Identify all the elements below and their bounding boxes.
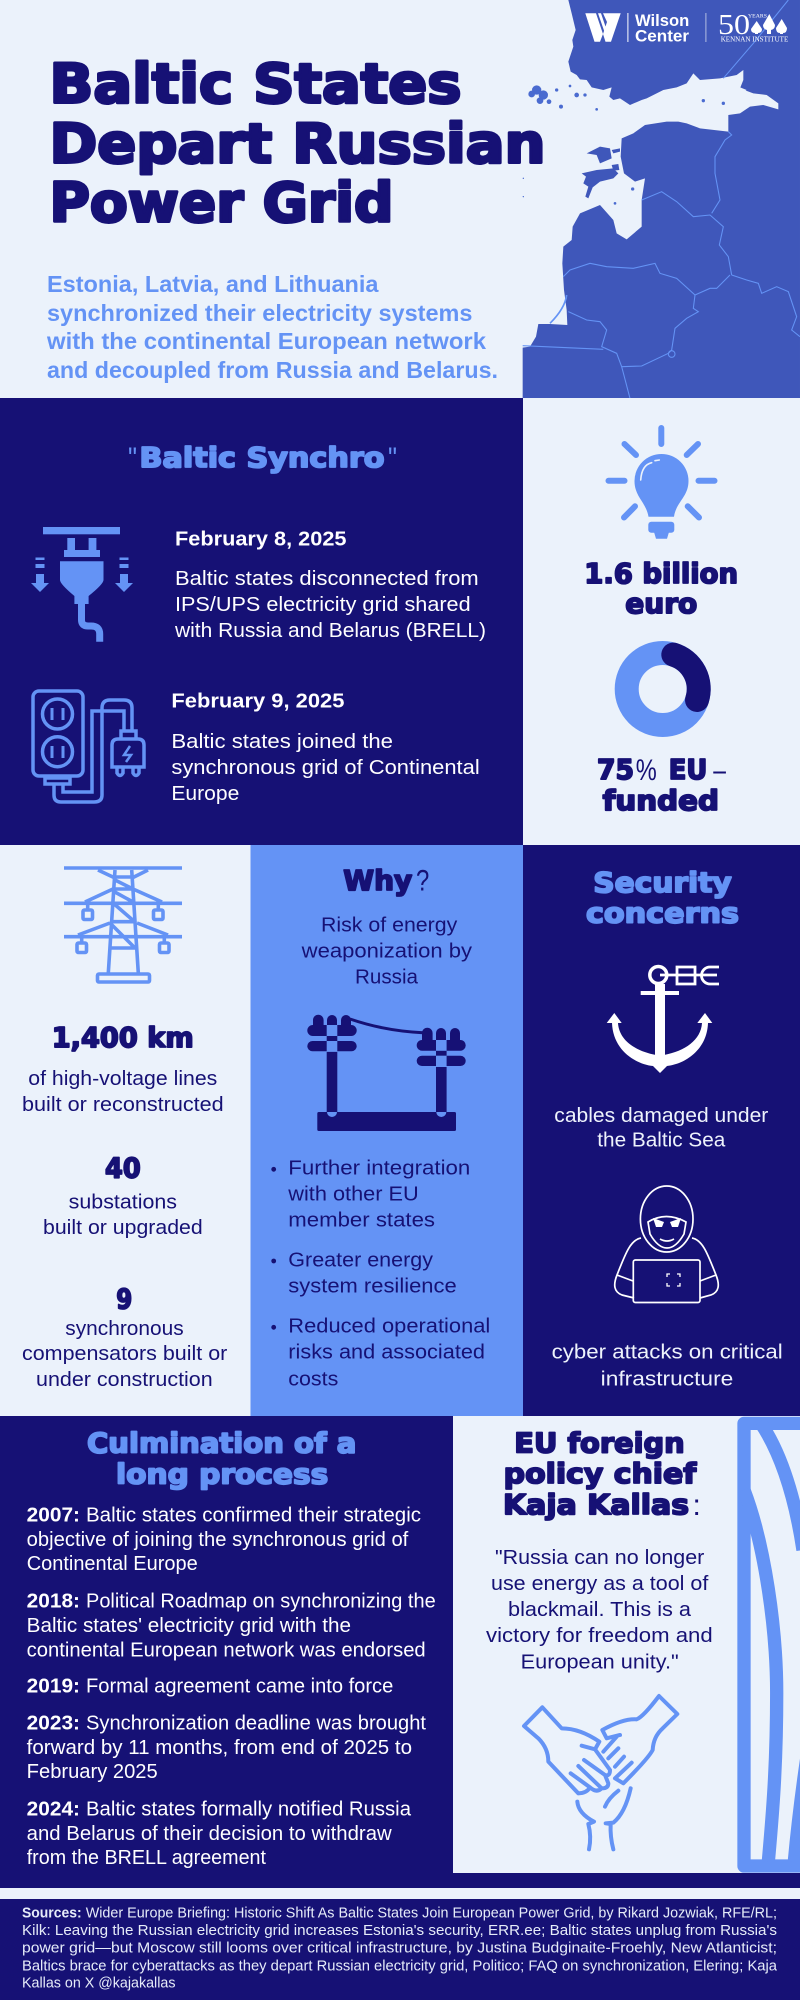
stat: 1.6 billion euro xyxy=(584,558,738,620)
text: risk of weaponization: weaponization by xyxy=(301,941,472,963)
timeline: 2019: 2019: xyxy=(27,1676,80,1698)
timeline: 2007 xyxy=(27,1505,421,1575)
stat: 9 synchronous compensators: compensators built or xyxy=(22,1343,228,1365)
quote text: European unity." xyxy=(521,1652,679,1674)
text: February 9 event xyxy=(171,691,480,805)
panel: sources: Kilk: Leaving the Russian electricity grid increases Estonia's security, ERR.ee; Baltic states unplug from Russia's xyxy=(22,1923,777,1939)
panel: header xyxy=(0,0,800,398)
icon: anchor with chain xyxy=(607,966,719,1073)
stat: 75% EU-funded xyxy=(597,754,726,817)
text: February 8 event: Baltic states disconnected from xyxy=(175,568,479,590)
stat: 1,400 km: built or reconstructed xyxy=(22,1094,224,1116)
timeline: 2023: February 2025 xyxy=(27,1761,158,1783)
list: reasons xyxy=(271,1158,490,1391)
timeline: 2007: Continental Europe xyxy=(27,1553,198,1575)
icon: joined hands xyxy=(524,1696,677,1849)
panel: funding xyxy=(523,398,800,845)
text: February 8 event: IPS/UPS electricity grid shared xyxy=(175,594,471,616)
quote text xyxy=(486,1547,713,1674)
heading: EU foreign policy chief: policy chief xyxy=(504,1458,697,1490)
stat: 40 substations xyxy=(43,1152,203,1239)
heading: Baltic Synchro: " xyxy=(128,442,137,475)
logo: 50 years Kennan Institute: YEARS xyxy=(748,14,767,20)
title: Power Grid xyxy=(50,172,394,234)
subtitle: with the continental European network xyxy=(46,328,487,354)
timeline: 2018 xyxy=(27,1591,436,1662)
heading: Why?: ? xyxy=(416,865,429,898)
timeline: 2024: 2024: xyxy=(27,1799,80,1821)
list: reasons: Reduced operational xyxy=(288,1316,490,1338)
logo: Wilson Center: Wilson xyxy=(635,11,689,30)
heading: EU foreign policy chief: : xyxy=(692,1489,701,1522)
text: February 9 event: synchronous grid of Continental xyxy=(171,757,480,779)
heading: Why?: Why xyxy=(343,865,412,897)
icon: power line poles xyxy=(307,1015,466,1131)
panel: Kaja Kallas quote xyxy=(453,1416,800,1873)
text: cables damaged: the Baltic Sea xyxy=(597,1130,726,1152)
text: risk of weaponization: Russia xyxy=(355,967,419,989)
list: reasons: member states xyxy=(288,1210,435,1232)
timeline: 2023: Synchronization deadline was brought xyxy=(86,1712,426,1734)
stat: 9 synchronous compensators: under construction xyxy=(36,1369,213,1391)
timeline: 2023: 2023: xyxy=(27,1712,80,1734)
logo: Wilson Center xyxy=(585,11,689,46)
stat: 1,400 km xyxy=(22,1022,224,1116)
quote text: "Russia can no longer xyxy=(495,1547,705,1569)
timeline: 2024: and Belarus of their decision to withdraw xyxy=(27,1823,392,1845)
list: reasons: Further integration xyxy=(288,1158,470,1180)
stat: 1.6 billion euro: euro xyxy=(625,588,697,620)
heading: Baltic Synchro: " xyxy=(388,442,397,475)
stat: 1,400 km: 1,400 km xyxy=(52,1022,194,1054)
heading: Security concerns: concerns xyxy=(586,898,739,930)
timeline: 2018: 2018: xyxy=(27,1591,80,1613)
stat: 75% EU-funded: % xyxy=(636,754,657,787)
timeline: 2007: 2007: xyxy=(27,1505,80,1527)
panel: sources: Wider Europe Briefing: Historic Shift As Baltic States Join European Power Grid, by Rikard Jozwiak, RFE/RL; xyxy=(86,1905,777,1921)
stat: 1.6 billion euro: 1.6 billion xyxy=(584,558,738,590)
panel: Culmination of a long process xyxy=(0,1416,453,1888)
heading: EU foreign policy chief: Kaja Kallas xyxy=(503,1489,689,1521)
heading: Culmination of a long process xyxy=(87,1427,356,1490)
decorative pylon frame xyxy=(744,1422,800,1866)
panel: sources: power grid—but Moscow still looms over critical infrastructure, by Justina Budginaite-Froehly, New Atlanticist; xyxy=(22,1941,777,1957)
bottom band xyxy=(0,1873,800,1888)
panel: sources: Sources: xyxy=(22,1905,82,1921)
heading: EU foreign policy chief: EU foreign xyxy=(514,1427,685,1459)
icon: light bulb xyxy=(608,428,714,539)
subtitle: Estonia, Latvia, and Lithuania xyxy=(47,271,379,297)
list: reasons: costs xyxy=(288,1369,338,1391)
panel: infrastructure figures xyxy=(0,845,250,1416)
stat: 9 synchronous compensators: 9 xyxy=(116,1283,132,1315)
stat: 75% EU-funded: funded xyxy=(603,785,719,817)
stat: 40 substations: substations xyxy=(69,1192,177,1214)
text: risk of weaponization xyxy=(301,915,472,989)
icon: unplugging plug xyxy=(31,527,133,642)
logo: Wilson Center: Center xyxy=(635,27,689,46)
text: cables damaged xyxy=(554,1105,769,1152)
text: February 8 event: February 8, 2025 xyxy=(175,529,346,551)
stat: 9 synchronous compensators: synchronous xyxy=(65,1318,184,1340)
heading: Baltic Synchro: Baltic Synchro xyxy=(140,442,384,474)
timeline: 2024: from the BRELL agreement xyxy=(27,1847,266,1869)
title: Baltic States xyxy=(50,52,462,116)
stat: 75% EU-funded: EU xyxy=(669,754,707,786)
quote text: use energy as a tool of xyxy=(491,1573,709,1595)
text: February 9 event: Baltic states joined the xyxy=(171,731,393,753)
quote text: blackmail. This is a xyxy=(508,1599,692,1621)
list: reasons: system resilience xyxy=(288,1276,457,1298)
title: Depart Russian xyxy=(50,112,546,176)
timeline: 2007: Baltic states confirmed their strategic xyxy=(86,1505,421,1527)
heading: Security concerns xyxy=(586,867,739,930)
text: risk of weaponization: Risk of energy xyxy=(321,915,457,937)
heading: Security concerns: Security xyxy=(593,867,732,899)
timeline: 2019: Formal agreement came into force xyxy=(86,1676,393,1698)
panel: Baltic Synchro xyxy=(0,398,523,845)
chart: 75 percent donut xyxy=(627,653,699,725)
list: reasons: with other EU xyxy=(287,1184,419,1206)
logos xyxy=(585,9,789,46)
timeline: 2023 xyxy=(27,1712,426,1783)
text: February 9 event: Europe xyxy=(171,783,239,805)
stat: 75% EU-funded: – xyxy=(713,754,726,787)
timeline: 2023: forward by 11 months, from end of 2025 to xyxy=(27,1737,412,1759)
heading: EU foreign policy chief xyxy=(503,1427,701,1522)
text: February 8 event: with Russia and Belarus (BRELL) xyxy=(174,620,486,642)
map of the Baltic region xyxy=(523,0,800,398)
text: cyber attacks: infrastructure xyxy=(601,1369,733,1391)
logo: 50 years Kennan Institute: 50 xyxy=(718,9,750,41)
icon: hacker at laptop xyxy=(615,1186,718,1302)
subtitle: and decoupled from Russia and Belarus. xyxy=(47,357,498,383)
logo: 50 years Kennan Institute: KENNAN INSTITUTE xyxy=(721,35,789,44)
panel: Security concerns xyxy=(523,845,800,1416)
timeline: 2024 xyxy=(27,1799,412,1869)
icon: power strip and plug xyxy=(33,691,144,802)
subtitle xyxy=(46,271,498,383)
panel: Why xyxy=(250,845,523,1416)
list: reasons: Greater energy xyxy=(288,1250,433,1272)
stat: 75% EU-funded: 75 xyxy=(597,754,634,786)
heading: Culmination of a long process: long process xyxy=(116,1458,328,1490)
subtitle: synchronized their electricity systems xyxy=(47,300,472,326)
icon: transmission tower xyxy=(64,868,182,982)
timeline: 2018: Baltic states' electricity grid with the xyxy=(27,1615,351,1637)
stat: 40 substations: built or upgraded xyxy=(43,1217,203,1239)
text: February 9 event: February 9, 2025 xyxy=(171,691,344,713)
timeline: 2007: objective of joining the synchronous grid of xyxy=(27,1529,409,1551)
text: February 8 event xyxy=(174,529,486,642)
list: reasons: risks and associated xyxy=(288,1342,485,1364)
timeline: 2018: Political Roadmap on synchronizing the xyxy=(86,1591,436,1613)
stat: 1,400 km: of high-voltage lines xyxy=(28,1068,217,1090)
quote text: victory for freedom and xyxy=(486,1625,713,1647)
stat: 40 substations: 40 xyxy=(105,1152,141,1184)
timeline: 2024: Baltic states formally notified Russia xyxy=(86,1799,412,1821)
panel: sources: Kallas on X @kajakallas xyxy=(22,1976,176,1992)
logo: 50 years Kennan Institute xyxy=(718,9,789,44)
panel: sources: Baltics brace for cyberattacks as they depart Russian electricity grid, Politico; FAQ on synchronization, Elering; Kaja xyxy=(22,1959,778,1975)
text: cyber attacks: cyber attacks on critical xyxy=(552,1342,783,1364)
stat: 9 synchronous compensators xyxy=(22,1283,228,1391)
heading: Culmination of a long process: Culmination of a xyxy=(87,1427,356,1459)
timeline: 2018: continental European network was endorsed xyxy=(27,1640,426,1662)
title xyxy=(50,52,546,234)
text: cables damaged: cables damaged under xyxy=(554,1105,769,1127)
panel: sources xyxy=(0,1899,800,2000)
text: cyber attacks xyxy=(552,1342,783,1391)
